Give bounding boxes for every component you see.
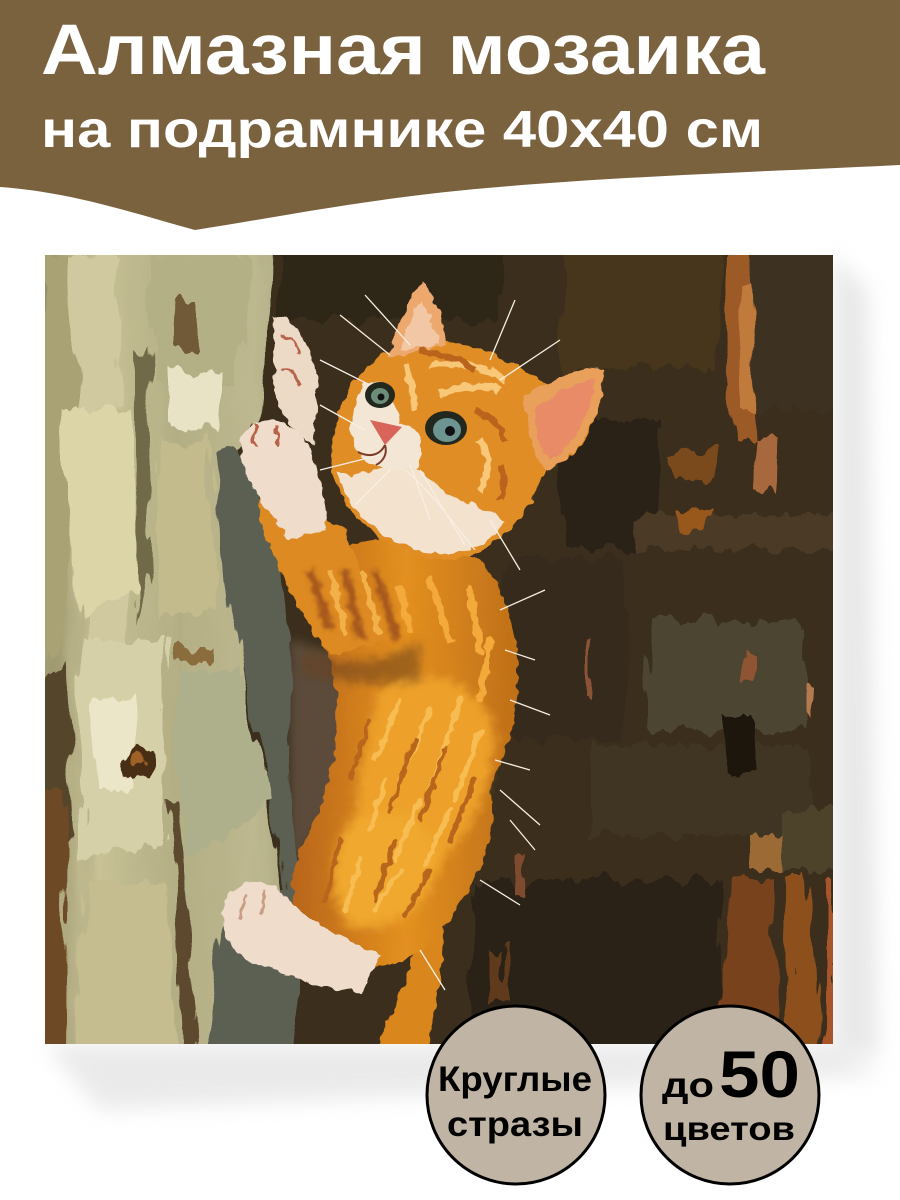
banner [0,0,900,230]
title: Алмазная мозаика [41,11,766,90]
whiskers [320,295,560,990]
subtitle: на подрамнике 40х40 см [41,101,763,159]
face white [352,382,421,470]
badge: round rhinestones: стразы [447,1105,583,1144]
badge: up to 50 colours: до [662,1066,714,1105]
light wooden trunk [30,240,300,1060]
front leg [258,496,368,656]
ear: left [388,282,446,358]
badge: up to 50 colours: 50 [719,1037,800,1111]
lower paw [240,420,326,540]
eyes and nose [358,382,467,465]
chest [338,462,505,554]
badge: round rhinestones: Круглые [438,1060,592,1099]
kitten [223,282,604,1050]
body fur strokes [325,580,490,915]
dark background [237,255,833,1044]
upper paw [272,315,318,445]
canvas shadow [45,255,878,1110]
badge: round rhinestones [427,1006,605,1184]
painting: kitten on a tree [45,255,833,1044]
tail [380,926,444,1044]
ear: right [525,368,604,470]
grey-brown shadow behind kitten [287,639,339,861]
body [292,537,518,967]
badge: up to 50 colours: цветов [663,1110,795,1147]
head [332,341,601,560]
rear paw [223,881,380,992]
badge: up to 50 colours [641,1006,819,1184]
